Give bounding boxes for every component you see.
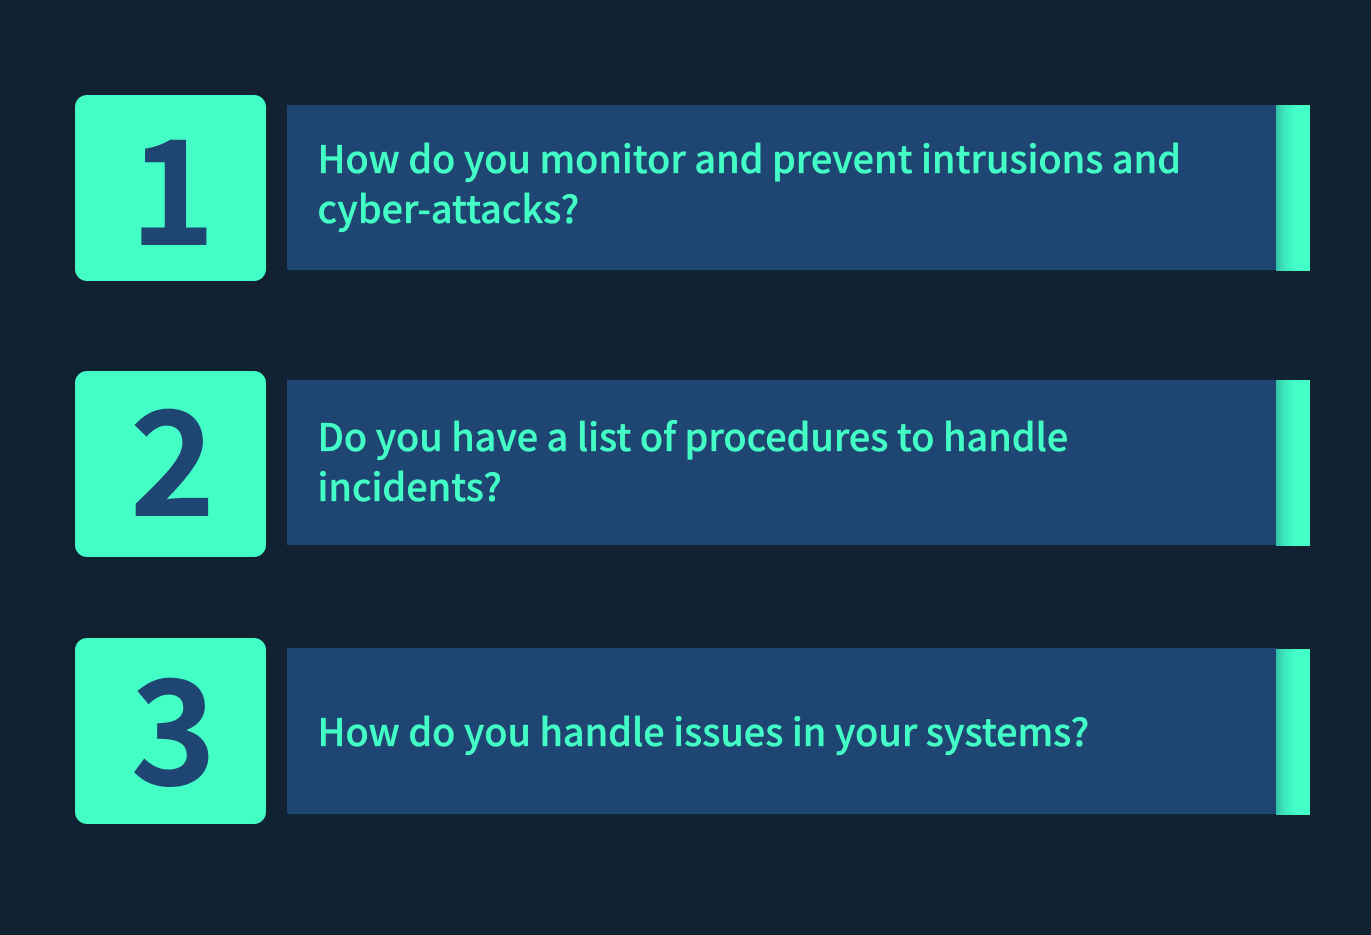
panel: question 3 <box>287 648 1277 814</box>
question 1 text <box>318 129 1181 234</box>
row 3 <box>75 617 1310 828</box>
number tile 2 <box>75 371 266 557</box>
number tile 3: 3 <box>130 617 217 828</box>
accent tab 2 <box>1276 380 1310 546</box>
panel: question 2 <box>287 380 1277 545</box>
question 1 text: cyber-attacks? <box>318 179 579 234</box>
number tile 2: 2 <box>129 348 216 559</box>
question 2 text <box>318 407 1068 512</box>
row 1 <box>75 77 1310 288</box>
number tile 1: 1 <box>129 77 216 288</box>
number tile 1 <box>75 95 266 281</box>
accent tab 3 <box>1276 649 1310 815</box>
question 2 text: Do you have a list of procedures to handle <box>318 407 1068 462</box>
question 1 text: How do you monitor and prevent intrusions and <box>318 129 1181 184</box>
number tile 3 <box>75 638 266 824</box>
question 2 text: incidents? <box>318 457 502 512</box>
row 2 <box>75 348 1310 559</box>
accent tab 1 <box>1276 105 1310 271</box>
question 3 text: How do you handle issues in your systems? <box>318 702 1089 757</box>
panel: question 1 <box>287 105 1277 270</box>
